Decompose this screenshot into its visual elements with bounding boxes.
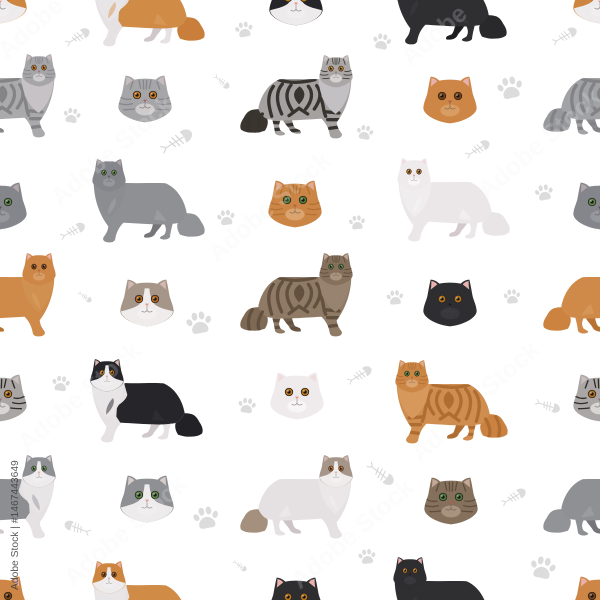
head: blue, right edge <box>573 183 600 229</box>
cat: black silver tabby <box>240 55 353 138</box>
head: orange and white, right edge <box>573 0 600 23</box>
cat: black and white <box>90 359 203 442</box>
cat: red, right edge <box>543 253 600 336</box>
head: red, bottom left edge <box>0 577 27 600</box>
faint diagonal stock watermarks: Adobe Stock <box>59 470 192 592</box>
cat: blue <box>92 159 205 242</box>
head: black, bottom centre <box>269 578 323 600</box>
head: dark tabby, left edge <box>0 375 27 421</box>
cat: brown tabby <box>240 253 353 336</box>
head: red <box>423 77 477 123</box>
head: cream and taupe <box>120 280 174 326</box>
head: grey and white <box>120 476 174 522</box>
faint diagonal stock watermarks: Adobe Stock <box>286 473 419 595</box>
cat: red, left edge <box>0 253 56 336</box>
vertical stock id text: Adobe Stock | #1467443649 <box>10 460 21 590</box>
head: red, bottom right edge <box>573 577 600 600</box>
cat: cream with taupe points <box>240 455 353 538</box>
head: grey tabby <box>118 76 172 122</box>
cat: silver-grey tabby, right edge <box>543 54 600 137</box>
faint diagonal stock watermarks: Adobe <box>396 0 473 72</box>
head: black and white, top <box>269 0 323 25</box>
faint diagonal stock watermarks: Adobe Stock <box>203 146 336 268</box>
head: black <box>423 280 477 326</box>
cat: orange and white, cropped at top <box>92 0 205 46</box>
head: orange and white, left edge <box>0 0 27 23</box>
paw prints scattered across the pattern <box>51 20 558 581</box>
head: blue, left edge <box>0 183 27 229</box>
faint diagonal stock watermarks: Adobe Stock <box>13 336 146 458</box>
cat: white <box>397 158 510 241</box>
cat: black, bottom <box>393 557 506 600</box>
cat: orange tabby <box>395 360 508 443</box>
head: white <box>270 373 324 419</box>
faint diagonal stock watermarks: Adobe Stock <box>46 90 179 212</box>
cat: silver-grey tabby, left edge <box>0 54 56 137</box>
cat: blue, right edge <box>543 455 600 538</box>
head: dark tabby, right edge <box>573 375 600 421</box>
fish bones scattered across the pattern <box>59 25 579 573</box>
cat: orange and white, bottom <box>92 561 205 600</box>
head: orange tabby <box>268 181 322 227</box>
head: brown tabby <box>424 478 478 524</box>
faint diagonal stock watermarks: Stock <box>476 336 545 402</box>
cat: grey and white, left edge <box>0 455 56 538</box>
cat: black, cropped at top <box>394 0 507 44</box>
faint diagonal stock watermarks: Ad <box>406 425 449 468</box>
